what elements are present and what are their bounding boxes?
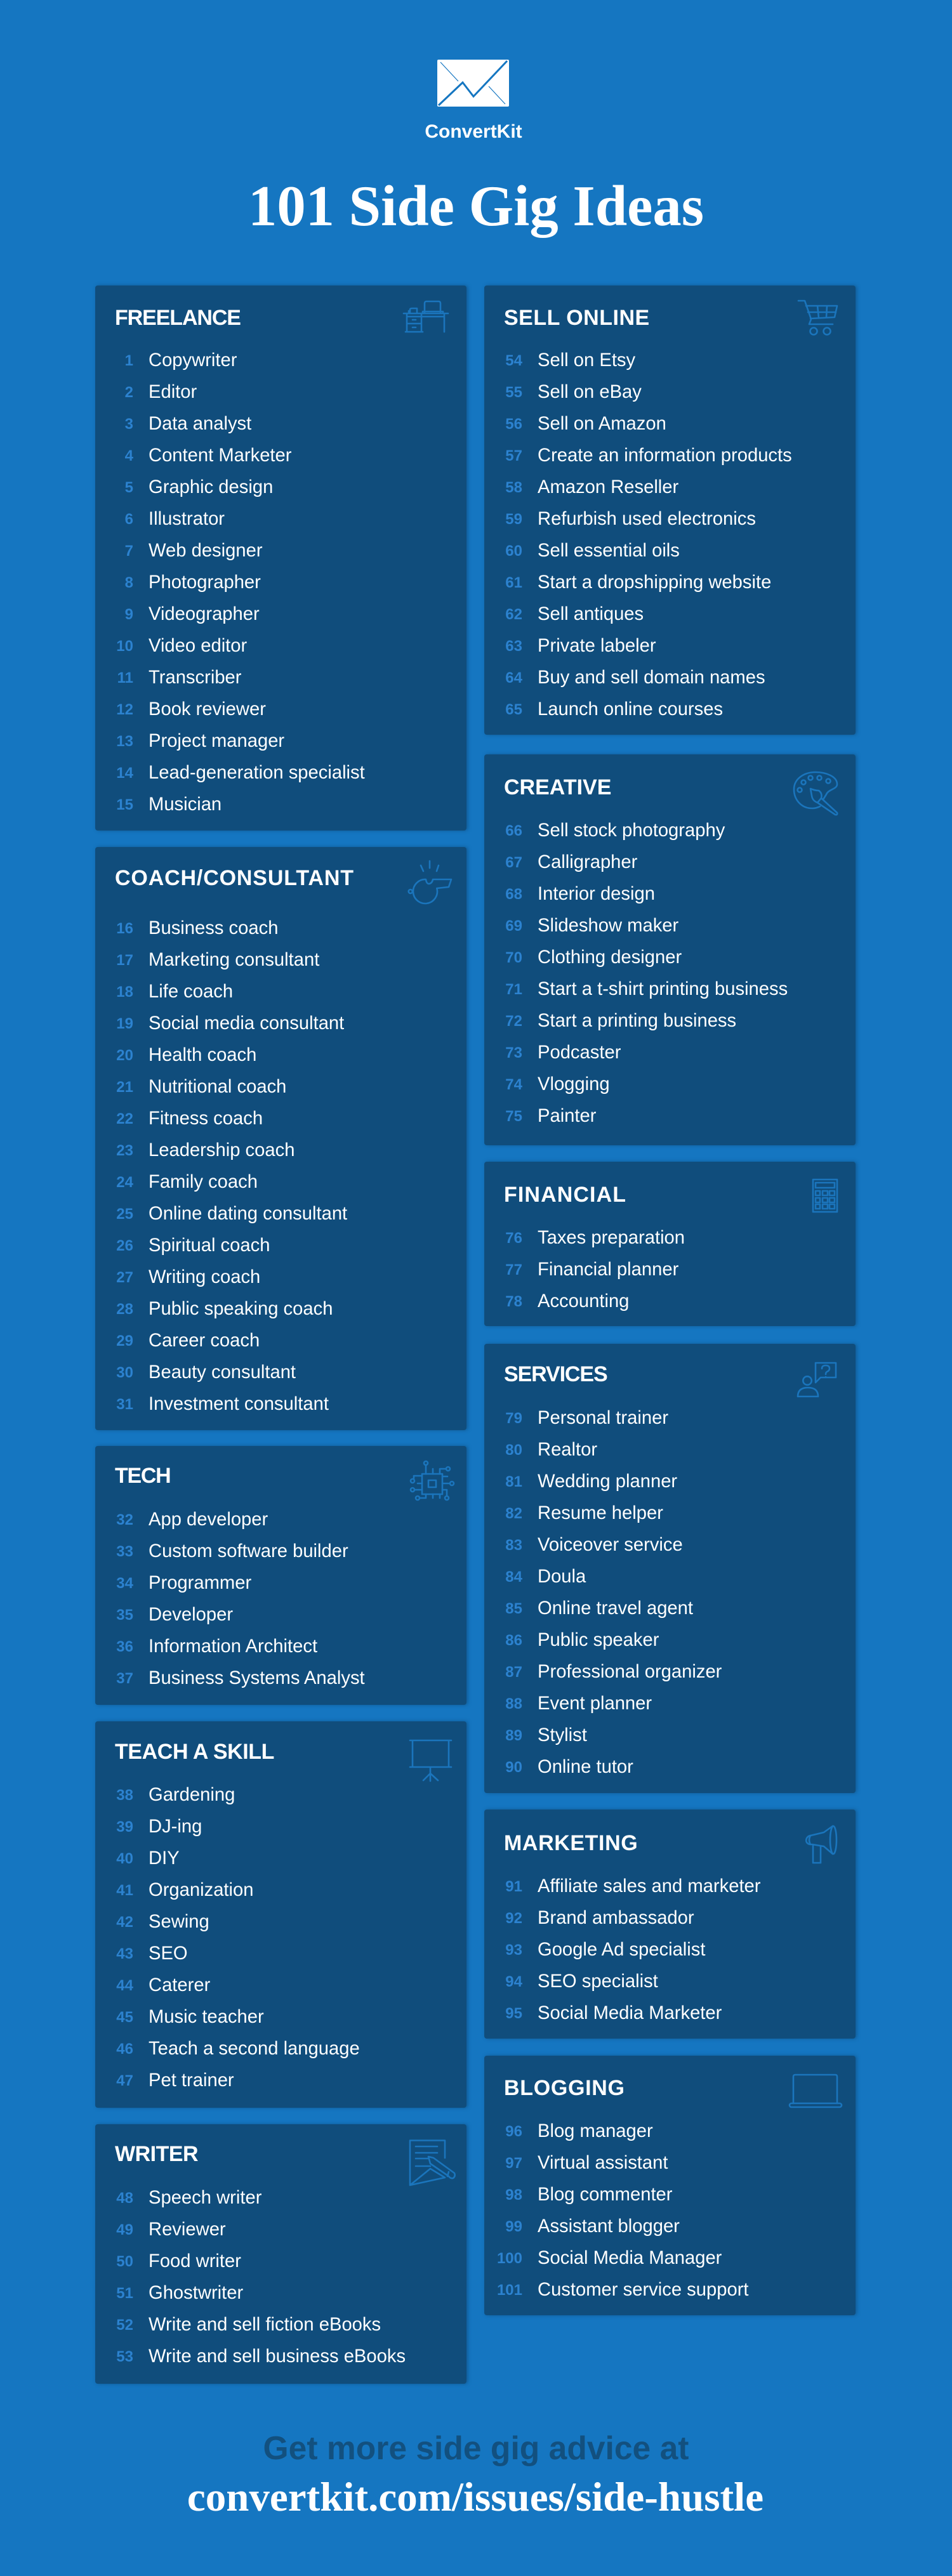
list: services ideas: 81: [505, 1473, 522, 1490]
icon: laptop: [788, 2073, 843, 2108]
list: blogging ideas: 99: [505, 2218, 522, 2235]
heading: tech: TECH: [115, 1464, 170, 1488]
list: freelance ideas: 10: [116, 638, 133, 655]
list: creative ideas: Calligrapher: [538, 852, 637, 872]
list: creative ideas: 71: [505, 981, 522, 998]
panel: financial: [484, 1162, 856, 1326]
list: marketing ideas: Affiliate sales and marketer: [538, 1876, 761, 1896]
list: freelance ideas: Copywriter: [149, 350, 237, 371]
list: teaching ideas: 42: [116, 1914, 133, 1931]
panel: creative: [484, 754, 856, 1145]
list: sell online ideas: 57: [505, 447, 522, 464]
list: freelance ideas: Lead-generation specialist: [149, 763, 365, 783]
list: marketing ideas: Social Media Marketer: [538, 2003, 722, 2023]
list: freelance ideas: Content Marketer: [149, 445, 292, 466]
heading: sell online: SELL ONLINE: [504, 306, 650, 330]
list: writer ideas: Write and sell fiction eBooks: [149, 2315, 381, 2335]
list: creative ideas: 72: [505, 1013, 522, 1030]
list: sell online ideas: Sell on eBay: [538, 382, 642, 402]
list: blogging ideas: Social Media Manager: [538, 2248, 722, 2268]
list: sell online ideas: Refurbish used electronics: [538, 509, 756, 529]
list: teaching ideas: [116, 1785, 360, 2091]
list: coach ideas: Family coach: [149, 1172, 258, 1192]
list: freelance ideas: 1: [125, 352, 133, 369]
list: services ideas: [505, 1408, 722, 1777]
list: creative ideas: Podcaster: [538, 1042, 621, 1063]
list: blogging ideas: 97: [505, 2155, 522, 2172]
list: services ideas: Doula: [538, 1567, 586, 1587]
list: writer ideas: 53: [116, 2348, 133, 2365]
icon: projector screen: [409, 1740, 452, 1782]
list: services ideas: 80: [505, 1442, 522, 1459]
list: coach ideas: Investment consultant: [149, 1394, 329, 1414]
list: services ideas: Online tutor: [538, 1757, 633, 1777]
list: coach ideas: 26: [116, 1237, 133, 1254]
list: tech ideas: 35: [116, 1607, 133, 1624]
list: tech ideas: Business Systems Analyst: [149, 1668, 365, 1688]
list: services ideas: 85: [505, 1600, 522, 1617]
footer url: convertkit.com/issues/side-hustle: [187, 2474, 764, 2520]
heading: freelance: FREELANCE: [115, 306, 241, 330]
logo: ConvertKit: [425, 60, 522, 142]
list: creative ideas: 75: [505, 1108, 522, 1125]
list: sell online ideas: Amazon Reseller: [538, 477, 678, 497]
list: services ideas: 90: [505, 1759, 522, 1776]
list: writer ideas: Reviewer: [149, 2219, 226, 2240]
list: blogging ideas: Assistant blogger: [538, 2216, 680, 2237]
list: marketing ideas: 92: [505, 1910, 522, 1927]
list: freelance ideas: Graphic design: [149, 477, 273, 497]
heading: financial: FINANCIAL: [504, 1183, 626, 1207]
list: coach ideas: 18: [116, 983, 133, 1001]
list: teaching ideas: DJ-ing: [149, 1817, 202, 1837]
list: sell online ideas: Sell on Etsy: [538, 350, 635, 371]
list: sell online ideas: 59: [505, 511, 522, 528]
list: sell online ideas: 62: [505, 606, 522, 623]
list: sell online ideas: Create an information products: [538, 445, 792, 466]
list: creative ideas: Interior design: [538, 884, 655, 904]
list: teaching ideas: 46: [116, 2040, 133, 2058]
list: coach ideas: 19: [116, 1015, 133, 1032]
list: coach ideas: Business coach: [149, 918, 278, 938]
list: coach ideas: [116, 918, 347, 1414]
list: teaching ideas: 43: [116, 1945, 133, 1962]
panel: teach a skill: [95, 1721, 466, 2108]
list: writer ideas: 51: [116, 2285, 133, 2302]
list: marketing ideas: 94: [505, 1973, 522, 1990]
list: writer ideas: [116, 2188, 406, 2367]
list: freelance ideas: Video editor: [149, 636, 247, 656]
panel: freelance: [95, 286, 466, 831]
list: teaching ideas: 41: [116, 1882, 133, 1899]
list: tech ideas: Custom software builder: [149, 1541, 348, 1561]
heading: services: SERVICES: [504, 1362, 607, 1386]
list: creative ideas: 70: [505, 949, 522, 966]
list: services ideas: 87: [505, 1664, 522, 1681]
list: services ideas: Online travel agent: [538, 1598, 693, 1619]
list: blogging ideas: Blog manager: [538, 2121, 653, 2141]
list: coach ideas: 24: [116, 1174, 133, 1191]
icon: shopping cart: [797, 299, 838, 336]
list: coach ideas: 28: [116, 1301, 133, 1318]
list: blogging ideas: 100: [497, 2250, 522, 2267]
list: sell online ideas: Sell on Amazon: [538, 414, 666, 434]
list: freelance ideas: Transcriber: [149, 667, 242, 688]
list: marketing ideas: Google Ad specialist: [538, 1940, 705, 1960]
list: creative ideas: [505, 820, 788, 1126]
list: teaching ideas: Pet trainer: [149, 2070, 234, 2091]
list: creative ideas: 69: [505, 917, 522, 935]
list: freelance ideas: [116, 350, 365, 815]
list: coach ideas: 23: [116, 1142, 133, 1159]
list: teaching ideas: Organization: [149, 1880, 254, 1900]
icon: envelope: [437, 60, 509, 107]
list: creative ideas: Clothing designer: [538, 947, 682, 968]
list: writer ideas: Write and sell business eBooks: [149, 2346, 406, 2367]
list: freelance ideas: 5: [125, 479, 133, 496]
list: services ideas: 84: [505, 1568, 522, 1586]
list: blogging ideas: 96: [505, 2123, 522, 2140]
list: coach ideas: Marketing consultant: [149, 950, 319, 970]
list: services ideas: Event planner: [538, 1693, 652, 1714]
heading: writer: WRITER: [115, 2142, 198, 2166]
list: marketing ideas: [505, 1876, 761, 2023]
list: sell online ideas: 58: [505, 479, 522, 496]
list: tech ideas: Developer: [149, 1605, 233, 1625]
icon: whistle: [407, 860, 452, 905]
list: blogging ideas: Blog commenter: [538, 2185, 673, 2205]
list: coach ideas: 30: [116, 1364, 133, 1381]
icon: circuit chip: [410, 1461, 454, 1501]
list: writer ideas: 48: [116, 2190, 133, 2207]
footer call to action: Get more side gig advice at: [263, 2429, 689, 2466]
list: services ideas: Resume helper: [538, 1503, 663, 1523]
list: coach ideas: Spiritual coach: [149, 1235, 270, 1256]
list: writer ideas: Speech writer: [149, 2188, 261, 2208]
list: financial ideas: 77: [505, 1261, 522, 1278]
list: creative ideas: 74: [505, 1076, 522, 1093]
icon: megaphone: [805, 1825, 838, 1864]
list: freelance ideas: Editor: [149, 382, 197, 402]
list: blogging ideas: Virtual assistant: [538, 2153, 668, 2173]
list: services ideas: Public speaker: [538, 1630, 659, 1650]
list: tech ideas: [116, 1509, 365, 1688]
list: teaching ideas: Teach a second language: [149, 2039, 360, 2059]
list: freelance ideas: 6: [125, 511, 133, 528]
list: creative ideas: Painter: [538, 1106, 596, 1126]
list: tech ideas: Information Architect: [149, 1636, 317, 1657]
list: sell online ideas: 55: [505, 384, 522, 401]
list: creative ideas: Start a t-shirt printing business: [538, 979, 788, 999]
list: coach ideas: Leadership coach: [149, 1140, 294, 1160]
heading: blogging: BLOGGING: [504, 2076, 625, 2100]
panel: coach/consultant: [95, 847, 466, 1430]
list: services ideas: Personal trainer: [538, 1408, 668, 1428]
icon: document and pencil: [409, 2139, 456, 2186]
list: sell online ideas: Buy and sell domain names: [538, 667, 765, 688]
list: freelance ideas: Book reviewer: [149, 699, 266, 720]
panel: services: [484, 1344, 856, 1793]
list: blogging ideas: 101: [497, 2282, 522, 2299]
list: sell online ideas: Private labeler: [538, 636, 656, 656]
list: tech ideas: 33: [116, 1543, 133, 1560]
list: teaching ideas: Music teacher: [149, 2007, 264, 2027]
panel: writer: [95, 2124, 466, 2384]
list: coach ideas: 27: [116, 1269, 133, 1286]
list: coach ideas: 20: [116, 1047, 133, 1064]
list: freelance ideas: 7: [125, 542, 133, 560]
list: writer ideas: Ghostwriter: [149, 2283, 243, 2303]
list: sell online ideas: 54: [505, 352, 522, 369]
list: writer ideas: 52: [116, 2316, 133, 2334]
list: coach ideas: Social media consultant: [149, 1013, 344, 1034]
list: teaching ideas: 40: [116, 1850, 133, 1867]
heading: creative: CREATIVE: [504, 775, 611, 799]
list: coach ideas: Career coach: [149, 1331, 260, 1351]
icon: paint palette: [793, 772, 838, 816]
list: creative ideas: 73: [505, 1044, 522, 1061]
list: financial ideas: 78: [505, 1293, 522, 1310]
panel: blogging: [484, 2056, 856, 2315]
list: teaching ideas: 45: [116, 2009, 133, 2026]
list: tech ideas: 36: [116, 1638, 133, 1655]
panel: sell online: [484, 286, 856, 735]
list: services ideas: 79: [505, 1410, 522, 1427]
list: tech ideas: App developer: [149, 1509, 268, 1530]
list: coach ideas: 16: [116, 920, 133, 937]
list: services ideas: Realtor: [538, 1440, 597, 1460]
list: services ideas: Professional organizer: [538, 1662, 722, 1682]
list: coach ideas: Nutritional coach: [149, 1077, 286, 1097]
heading: coach/consultant: COACH/CONSULTANT: [115, 866, 354, 890]
list: teaching ideas: Sewing: [149, 1912, 209, 1932]
list: financial ideas: Taxes preparation: [538, 1228, 685, 1248]
logo wordmark: ConvertKit: [425, 121, 522, 142]
list: marketing ideas: SEO specialist: [538, 1971, 658, 1992]
list: coach ideas: Life coach: [149, 982, 233, 1002]
list: coach ideas: Public speaking coach: [149, 1299, 333, 1319]
list: writer ideas: 49: [116, 2221, 133, 2238]
list: freelance ideas: 12: [116, 701, 133, 718]
list: sell online ideas: 56: [505, 416, 522, 433]
list: freelance ideas: 3: [125, 416, 133, 433]
list: teaching ideas: 47: [116, 2072, 133, 2089]
list: freelance ideas: Illustrator: [149, 509, 225, 529]
list: sell online ideas: 63: [505, 638, 522, 655]
title: 101 Side Gig Ideas: [248, 174, 704, 238]
list: freelance ideas: 11: [117, 669, 133, 687]
list: coach ideas: Health coach: [149, 1045, 256, 1065]
list: blogging ideas: [497, 2121, 749, 2300]
list: coach ideas: Fitness coach: [149, 1108, 263, 1129]
list: sell online ideas: Launch online courses: [538, 699, 723, 720]
list: coach ideas: 17: [116, 952, 133, 969]
list: financial ideas: 76: [505, 1230, 522, 1247]
list: sell online ideas: Sell essential oils: [538, 541, 680, 561]
list: teaching ideas: Gardening: [149, 1785, 235, 1805]
list: writer ideas: 50: [116, 2253, 133, 2270]
list: services ideas: Wedding planner: [538, 1471, 677, 1492]
list: creative ideas: Vlogging: [538, 1074, 610, 1094]
list: teaching ideas: 44: [116, 1977, 133, 1994]
list: services ideas: 83: [505, 1537, 522, 1554]
list: sell online ideas: [505, 350, 792, 720]
list: tech ideas: Programmer: [149, 1573, 251, 1593]
list: coach ideas: 29: [116, 1332, 133, 1350]
list: coach ideas: Beauty consultant: [149, 1362, 296, 1383]
list: sell online ideas: Start a dropshipping website: [538, 572, 771, 593]
list: marketing ideas: 95: [505, 2005, 522, 2022]
list: freelance ideas: 8: [125, 574, 133, 591]
icon: calculator: [812, 1179, 838, 1213]
list: teaching ideas: Caterer: [149, 1975, 210, 1995]
list: teaching ideas: 39: [116, 1818, 133, 1836]
list: freelance ideas: Project manager: [149, 731, 284, 751]
list: writer ideas: Food writer: [149, 2251, 241, 2271]
list: creative ideas: 68: [505, 886, 522, 903]
list: teaching ideas: SEO: [149, 1943, 188, 1964]
list: coach ideas: Writing coach: [149, 1267, 260, 1287]
list: services ideas: 88: [505, 1695, 522, 1712]
list: creative ideas: Slideshow maker: [538, 916, 678, 936]
list: services ideas: Voiceover service: [538, 1535, 683, 1555]
icon: person with question bubble: [797, 1362, 836, 1397]
icon: desk: [402, 301, 449, 332]
list: coach ideas: 21: [116, 1079, 133, 1096]
list: financial ideas: Financial planner: [538, 1259, 678, 1280]
list: creative ideas: Start a printing business: [538, 1011, 736, 1031]
list: services ideas: 86: [505, 1632, 522, 1649]
list: creative ideas: 67: [505, 854, 522, 871]
panel: tech: [95, 1446, 466, 1705]
list: creative ideas: 66: [505, 822, 522, 839]
list: freelance ideas: Musician: [149, 794, 221, 815]
list: services ideas: 82: [505, 1505, 522, 1522]
list: coach ideas: Online dating consultant: [149, 1204, 347, 1224]
list: blogging ideas: 98: [505, 2186, 522, 2204]
list: teaching ideas: DIY: [149, 1848, 180, 1869]
list: financial ideas: Accounting: [538, 1291, 629, 1311]
list: sell online ideas: 65: [505, 701, 522, 718]
list: creative ideas: Sell stock photography: [538, 820, 725, 841]
list: tech ideas: 37: [116, 1670, 133, 1687]
list: marketing ideas: Brand ambassador: [538, 1908, 694, 1928]
panel: marketing: [484, 1810, 856, 2039]
list: tech ideas: 34: [116, 1575, 133, 1592]
list: financial ideas: [505, 1228, 685, 1311]
list: freelance ideas: 2: [125, 384, 133, 401]
list: services ideas: Stylist: [538, 1725, 587, 1745]
list: freelance ideas: 4: [125, 447, 133, 464]
list: freelance ideas: 13: [116, 733, 133, 750]
list: marketing ideas: 93: [505, 1942, 522, 1959]
list: marketing ideas: 91: [505, 1878, 522, 1895]
list: tech ideas: 32: [116, 1511, 133, 1528]
list: freelance ideas: 14: [116, 765, 133, 782]
list: freelance ideas: Photographer: [149, 572, 261, 593]
list: freelance ideas: Web designer: [149, 541, 263, 561]
list: sell online ideas: 64: [505, 669, 522, 687]
list: sell online ideas: 60: [505, 542, 522, 560]
list: services ideas: 89: [505, 1727, 522, 1744]
list: coach ideas: 22: [116, 1110, 133, 1127]
list: blogging ideas: Customer service support: [538, 2280, 749, 2300]
list: freelance ideas: Videographer: [149, 604, 260, 624]
heading: marketing: MARKETING: [504, 1831, 638, 1855]
list: coach ideas: 31: [116, 1396, 133, 1413]
heading: teach a skill: TEACH A SKILL: [115, 1740, 274, 1764]
list: freelance ideas: Data analyst: [149, 414, 251, 434]
list: sell online ideas: Sell antiques: [538, 604, 644, 624]
list: freelance ideas: 9: [125, 606, 133, 623]
list: coach ideas: 25: [116, 1206, 133, 1223]
list: sell online ideas: 61: [505, 574, 522, 591]
list: freelance ideas: 15: [116, 796, 133, 813]
list: teaching ideas: 38: [116, 1787, 133, 1804]
